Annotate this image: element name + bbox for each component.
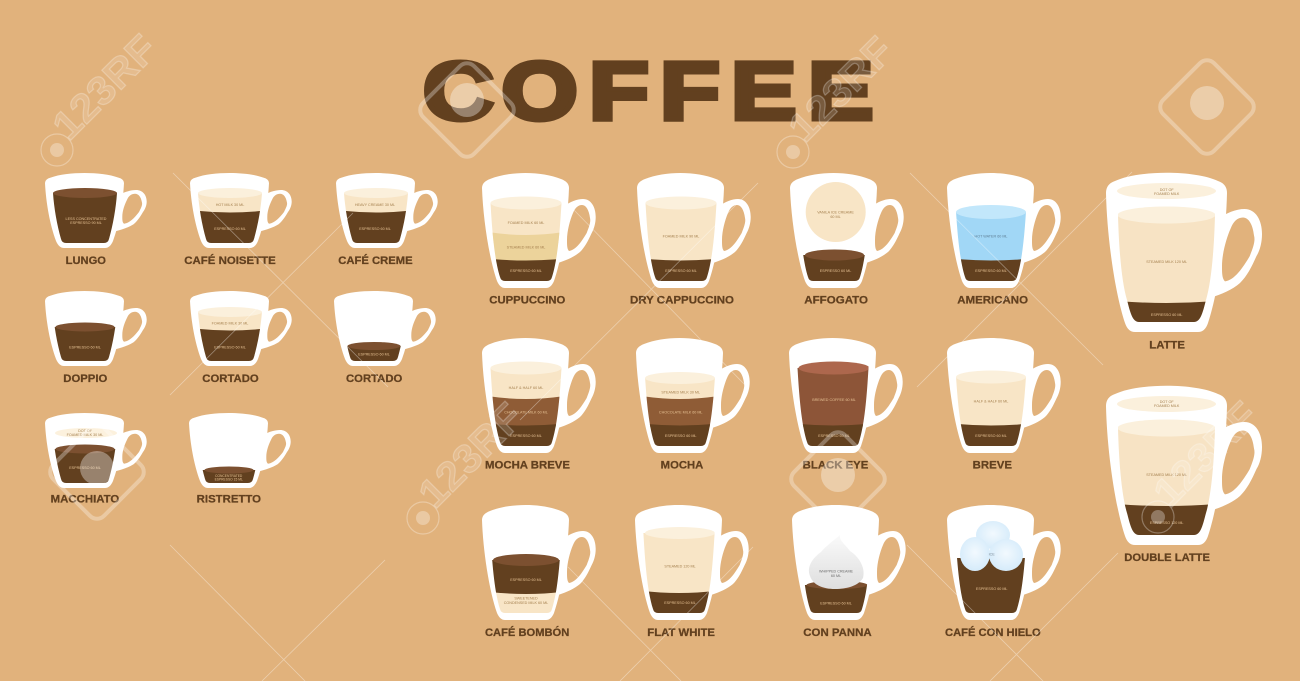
whipped cream — [809, 535, 864, 589]
cup: cafe creme — [336, 173, 438, 267]
cup: cafe bombon: SWEETENED — [514, 597, 538, 601]
cup: cuppuccino: CUPPUCCINO — [489, 295, 565, 307]
cup: double latte: ESPRESSO 120 ML — [1150, 521, 1184, 525]
cup: latte: FOAMED MILK — [1154, 192, 1180, 196]
cup: dry cappuccino: DRY CAPPUCCINO — [630, 295, 734, 307]
cup: cortado small: CORTADO — [346, 373, 402, 385]
cup: latte: DOT OF — [1160, 188, 1174, 192]
cup: cortado small — [334, 291, 436, 385]
cup: macchiato: ESPRESSO 60 ML — [69, 466, 101, 470]
cup: cafe noisette: HOT MILK 30 ML — [216, 203, 244, 207]
cup: mocha breve: MOCHA BREVE — [485, 460, 570, 472]
cup: cafe creme: HEAVY CREAME 30 ML — [355, 203, 395, 207]
cup: mocha breve: ESPRESSO 60 ML — [510, 434, 542, 438]
cup: cafe noisette — [184, 173, 292, 267]
cup: lungo: ESPRESSO 90 ML — [70, 221, 102, 225]
cup: breve: HALF & HALF 60 ML — [974, 400, 1008, 404]
cup: double latte: DOT OF — [1160, 400, 1174, 404]
cup: latte — [1106, 173, 1262, 352]
cup: affogato — [790, 173, 904, 307]
cup: breve: ESPRESSO 60 ML — [975, 434, 1007, 438]
cup: ristretto: ESPRESSO 15 ML — [215, 478, 243, 482]
cup: affogato: VANILA ICE CREAME — [817, 210, 854, 214]
cup: flat white: FLAT WHITE — [647, 627, 715, 639]
watermark stamp: top right frame — [1156, 56, 1258, 158]
cup: flat white: STEAMED 120 ML — [664, 564, 696, 568]
cup: ristretto: CONCENTRATED — [215, 474, 243, 478]
cup: black eye — [789, 338, 903, 472]
cup: mocha: STEAMED MILK 30 ML — [661, 390, 700, 394]
cup: breve: BREVE — [973, 460, 1012, 472]
cup: mocha breve: CHOCOLATE MILK 60 ML — [504, 410, 548, 414]
cup: mocha — [636, 338, 750, 472]
cup: cafe bombon: CAFÉ BOMBÓN — [485, 626, 570, 639]
cup: cafe creme: ESPRESSO 60 ML — [359, 227, 391, 231]
cup: con panna: WHIPPED CREAME — [819, 570, 854, 574]
cup: double latte: FOAMED MILK — [1154, 404, 1180, 408]
cup: doppio: DOPPIO — [63, 373, 107, 385]
cup: cuppuccino: ESPRESSO 60 ML — [510, 269, 542, 273]
watermark: lower right: 123RF — [1145, 394, 1267, 515]
cup: cafe con hielo: ESPRESSO 60 ML — [976, 587, 1007, 591]
cup: affogato: 60 ML — [830, 215, 841, 219]
cup: breve — [947, 338, 1061, 472]
cup: con panna: 60 ML — [831, 574, 841, 578]
cup: mocha: MOCHA — [661, 460, 703, 472]
cup: double latte — [1106, 386, 1262, 564]
cup: cortado with foam: FOAMED MILK 30 ML — [212, 322, 248, 326]
cup: cuppuccino: STEAMED MILK 60 ML — [507, 246, 545, 250]
cup: affogato: AFFOGATO — [804, 295, 868, 307]
cup: macchiato — [45, 413, 147, 506]
cup: doppio — [45, 291, 147, 385]
cup: cafe creme: CAFÉ CREME — [338, 254, 413, 267]
cup: mocha breve: HALF & HALF 60 ML — [509, 386, 543, 390]
watermark stamp: macchiato frame — [46, 421, 148, 523]
cup: flat white — [635, 505, 749, 639]
watermark: top left: 123RF — [44, 27, 166, 148]
cup: americano: AMERICANO — [957, 295, 1028, 307]
cup: mocha breve — [482, 338, 596, 472]
cup: latte: STEAMED MILK 120 ML — [1146, 260, 1187, 264]
cup: mocha: ESPRESSO 60 ML — [665, 434, 696, 438]
cup: double latte: DOUBLE LATTE — [1124, 552, 1210, 564]
cup: americano: ESPRESSO 60 ML — [975, 269, 1007, 273]
cup: mocha: CHOCOLATE MILK 60 ML — [659, 410, 702, 414]
cup: americano — [947, 173, 1061, 307]
cup: cafe bombon — [482, 505, 596, 639]
cup: cafe bombon: ESPRESSO 60 ML — [510, 578, 542, 582]
watermark: lower middle: 123RF — [410, 395, 532, 516]
cup: cortado small: ESPRESSO 60 ML — [358, 352, 390, 356]
cup: cafe noisette: ESPRESSO 60 ML — [214, 227, 246, 231]
cup: black eye: BREWED COFFEE 60 ML — [812, 398, 856, 402]
cup: con panna: CON PANNA — [803, 627, 872, 639]
ice cubes — [960, 521, 1023, 571]
cup: cortado with foam: CORTADO — [202, 373, 259, 385]
cup: cafe con hielo: ICE — [989, 552, 995, 556]
cup: ristretto: RISTRETTO — [197, 494, 261, 506]
cup: flat white: ESPRESSO 60 ML — [664, 601, 696, 605]
cup: latte: ESPRESSO 60 ML — [1151, 313, 1182, 317]
cup: ristretto — [189, 413, 291, 506]
title: COFFEE — [423, 46, 873, 137]
cup: cafe bombon: CONDENSED MILK 60 ML — [504, 601, 548, 605]
cup: americano: HOT WATER 60 ML — [975, 234, 1007, 238]
cup: black eye: BLACK EYE — [803, 460, 868, 472]
cup: black eye: ESPRESSO 60 ML — [818, 434, 850, 438]
cup: doppio: ESPRESSO 60 ML — [69, 346, 101, 350]
cup: double latte: STEAMED MILK 120 ML — [1146, 473, 1187, 477]
cup: con panna: ESPRESSO 60 ML — [820, 602, 852, 606]
cup: cafe con hielo — [945, 505, 1061, 639]
watermark stamp: top centre frame — [416, 59, 518, 161]
cup: lungo — [45, 173, 147, 267]
cup: cuppuccino: FOAMED MILK 60 ML — [508, 221, 544, 225]
cup: latte: LATTE — [1149, 340, 1185, 352]
cup: con panna — [792, 505, 906, 639]
cup: macchiato: DOT OF — [78, 429, 93, 433]
cup: cortado with foam: ESPRESSO 60 ML — [214, 346, 246, 350]
cup: macchiato: FOAMED MILK 30 ML — [67, 433, 103, 437]
cup: lungo: LUNGO — [66, 255, 106, 267]
cup: lungo: LESS CONCENTRATED — [66, 217, 107, 221]
watermark: top middle: 123RF — [780, 29, 902, 150]
cup: cafe noisette: CAFÉ NOISETTE — [184, 254, 276, 267]
cup: dry cappuccino: ESPRESSO 60 ML — [665, 269, 697, 273]
cup: affogato: ESPRESSO 60 ML — [820, 269, 851, 273]
cup: cuppuccino — [482, 173, 596, 307]
watermark stamp: black eye frame — [787, 428, 889, 530]
cup: cortado with foam — [190, 291, 292, 385]
cup: dry cappuccino: FOAMED MILK 90 ML — [663, 234, 699, 238]
cup: dry cappuccino — [630, 173, 751, 307]
cup: cafe con hielo: CAFÉ CON HIELO — [945, 626, 1041, 639]
cup: macchiato: MACCHIATO — [51, 494, 119, 506]
